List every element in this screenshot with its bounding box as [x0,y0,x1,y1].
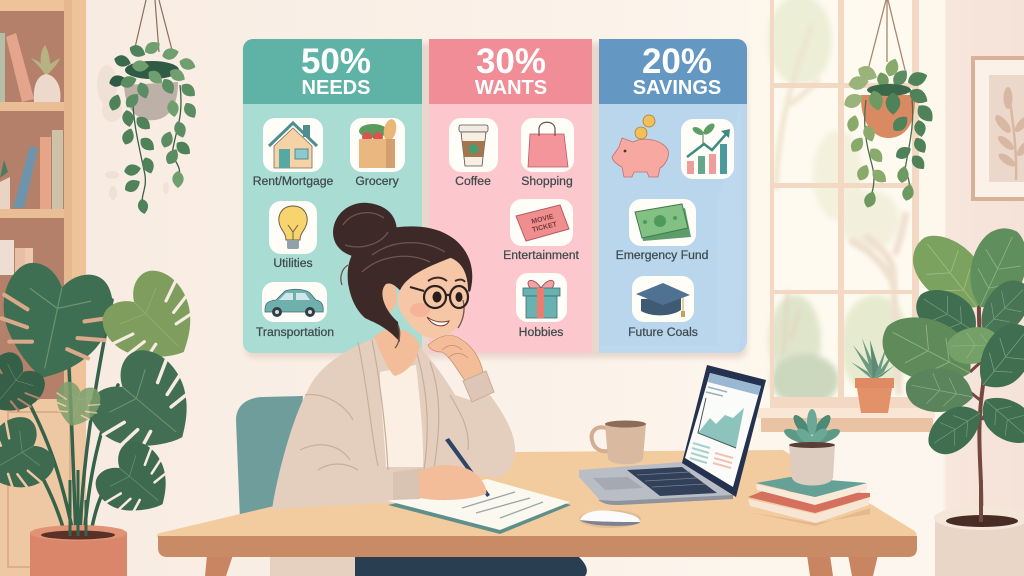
coffee mug [592,420,646,464]
laptop [579,365,766,505]
panel: wants [429,39,592,353]
icon: graduation cap [632,276,694,322]
ear [379,282,397,312]
icon: house, Rent/Mortgage [263,118,323,172]
glasses [410,286,468,308]
label: Hobbies: Hobbies [519,325,563,339]
sleeve cuff left [393,468,423,500]
cardigan details [300,340,468,470]
label: Rent/Mortgage: Rent/Mortgage [253,174,334,188]
icon: shopping bag [521,118,574,172]
face [398,258,468,339]
computer mouse [579,510,641,528]
blush [410,303,430,317]
icon: cash stack [629,199,696,246]
desk [157,450,917,576]
label: Transportation: Transportation [256,325,334,339]
window sill plant [851,338,895,413]
icon: movie ticket [510,199,573,246]
label: Utilities: Utilities [273,256,313,270]
panel: wants: 30% [476,42,546,81]
fiddle leaf plant [871,219,1024,576]
icon: grocery bag [350,118,405,172]
icon: gift box [516,273,567,322]
window sill [755,408,935,432]
icon: car [262,282,327,322]
icon: growth chart [681,119,734,179]
panel: savings: 20% [642,42,712,81]
thinking hand [428,335,483,382]
stacked books [748,477,870,526]
panel: needs: 50% [301,42,371,81]
panel: needs [243,39,422,353]
neck [374,329,420,376]
budget poster [243,39,747,358]
label: Future Coals: Future Coals [628,325,698,339]
hanging plant left [97,0,199,215]
label: Coffee: Coffee [455,174,491,188]
icon: piggy bank [612,115,668,177]
panel: savings: SAVINGS [633,77,721,99]
icon: movie ticket: TICKET [532,221,558,234]
label: Shopping: Shopping [521,174,573,188]
hair back [348,226,472,342]
lower cardigan and trousers under desk [270,550,587,576]
sleeve cuff [463,371,494,402]
framed leaf art [973,58,1024,199]
label: Emergency Fund: Emergency Fund [616,248,708,262]
monstera plant [0,258,215,576]
icon: coffee cup [449,118,498,172]
window [750,0,945,420]
bookshelf [0,0,86,576]
hanging plant right [841,0,937,209]
smile [427,317,449,326]
cardigan torso [272,338,515,510]
eyes [432,292,462,302]
panel: needs: NEEDS [302,77,370,99]
label: Entertainment: Entertainment [503,248,580,262]
hair strands [341,213,464,348]
chair [236,396,303,520]
eyebrows [428,278,465,282]
notebook [388,479,571,534]
label: Grocery: Grocery [355,174,400,188]
panel: savings [599,39,747,353]
writing hand [418,465,486,500]
hair bun [333,203,397,258]
icon: light bulb [269,201,317,254]
potted succulent [782,409,842,486]
woman [272,203,515,510]
icon: movie ticket: MOVIE [531,213,555,226]
panel: wants: WANTS [475,77,547,99]
t-shirt [380,365,423,467]
pen [445,438,490,497]
